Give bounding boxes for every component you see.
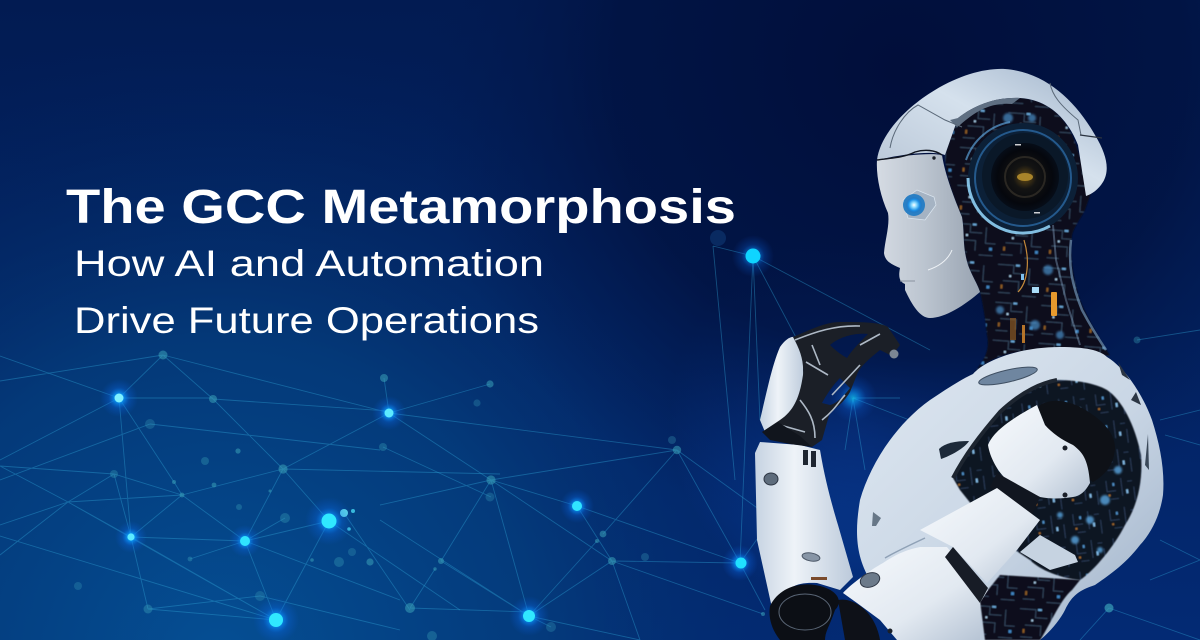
robot: camera lens: [966, 122, 1078, 233]
robot: upper arm segments: [838, 488, 1040, 640]
robot illustration: [755, 69, 1163, 640]
robot: glowing eye: [903, 190, 936, 220]
robot: face: [877, 150, 980, 318]
subtitle: Drive Future Operations: [74, 300, 539, 341]
network of connected nodes: [0, 230, 1200, 640]
robot: torso shell: [857, 347, 1163, 640]
robot: head and neck circuitry: [945, 98, 1110, 374]
glowing nodes: [100, 235, 877, 640]
robot: raised hand: [760, 322, 900, 447]
robot: helmet: [877, 69, 1107, 196]
subtitle: How AI and Automation: [74, 243, 544, 284]
robot: shoulder: [988, 401, 1115, 515]
subtitle: [74, 243, 544, 341]
robot: forearm: [755, 442, 853, 640]
title: The GCC Metamorphosis: [66, 181, 736, 234]
